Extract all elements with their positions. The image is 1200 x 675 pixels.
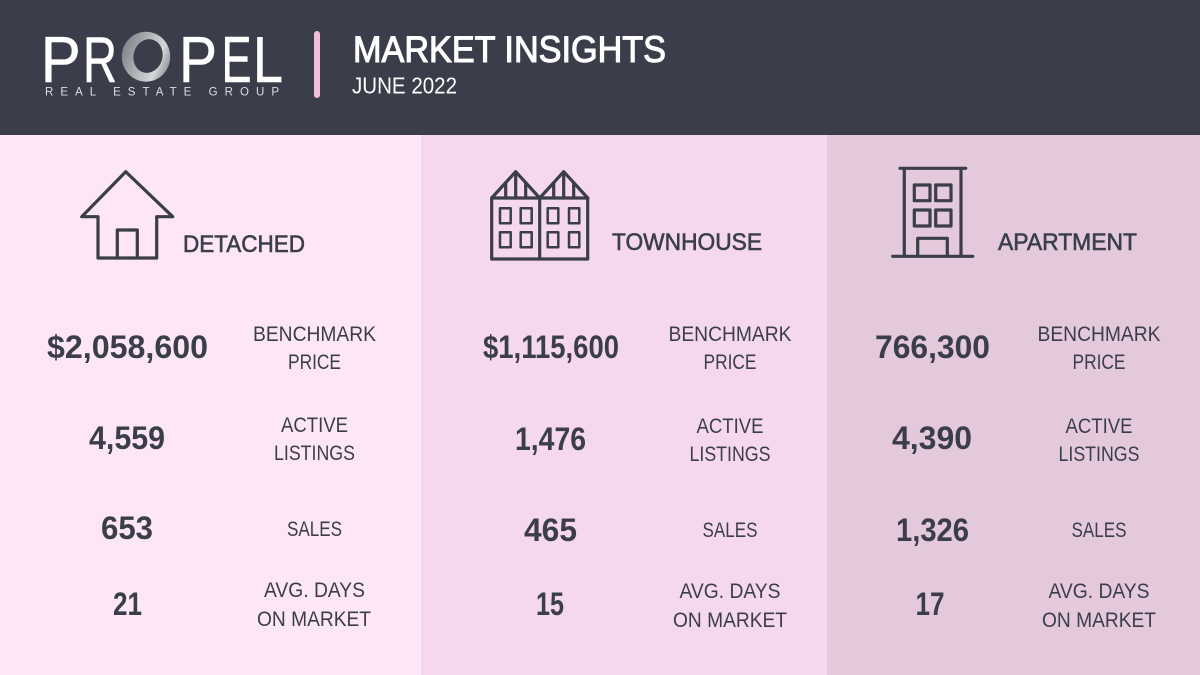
logo: R (83, 23, 117, 96)
stat: sales: 465 (524, 512, 577, 548)
stat: benchmark price: $1,115,600 (483, 329, 619, 365)
panel: townhouse (421, 135, 827, 675)
logo: E (222, 23, 252, 96)
divider (314, 31, 320, 98)
logo: P (179, 23, 217, 96)
stat: sales: 1,326 (896, 512, 969, 548)
stat: benchmark price: PRICE (288, 351, 341, 374)
stat: active listings: LISTINGS (690, 443, 770, 466)
stat: benchmark price (47, 323, 376, 374)
logo (41, 23, 283, 98)
stat: benchmark price: BENCHMARK (253, 323, 376, 346)
stat: active listings: LISTINGS (274, 442, 355, 465)
stat: average days on market: ON MARKET (673, 609, 787, 632)
stat: active listings: 1,476 (515, 421, 586, 457)
stat: average days on market: 21 (113, 586, 142, 622)
panel: detached (0, 135, 421, 675)
stat: average days on market: ON MARKET (1042, 609, 1156, 632)
header band (0, 0, 1200, 135)
stat: sales: SALES (1072, 519, 1126, 542)
stat: average days on market (916, 580, 1156, 632)
stat: average days on market: 17 (916, 586, 944, 622)
stat: benchmark price: $2,058,600 (47, 329, 208, 365)
heading: apartment: APARTMENT (998, 229, 1137, 256)
stat: active listings (89, 414, 355, 465)
logo: P (41, 23, 81, 96)
stat: average days on market: AVG. DAYS (680, 580, 780, 603)
stat: benchmark price (875, 323, 1160, 374)
stat: benchmark price: BENCHMARK (668, 323, 792, 346)
stat: benchmark price: PRICE (704, 351, 756, 374)
stat: average days on market (536, 580, 787, 632)
stat: benchmark price: BENCHMARK (1038, 323, 1160, 346)
stat: average days on market: AVG. DAYS (1048, 580, 1150, 603)
stat: active listings (515, 415, 770, 466)
stat: sales: SALES (702, 519, 758, 542)
stat: average days on market: 15 (536, 586, 564, 622)
title: MARKET INSIGHTS (353, 29, 666, 70)
heading: detached: DETACHED (183, 231, 305, 258)
stat: sales (101, 510, 342, 546)
stat: average days on market: AVG. DAYS (264, 579, 365, 602)
stat: average days on market: ON MARKET (257, 608, 371, 631)
icon: apartment building (893, 168, 973, 256)
icon: townhouse (492, 172, 588, 259)
stat: sales: 653 (101, 510, 153, 546)
stat: sales (896, 512, 1126, 548)
stat: sales: SALES (287, 518, 342, 541)
stat: active listings: 4,559 (89, 420, 165, 456)
stat: benchmark price (483, 323, 792, 374)
stat: sales (524, 512, 758, 548)
logo: L (253, 23, 283, 96)
stat: benchmark price: 766,300 (875, 329, 990, 365)
stat: active listings: ACTIVE (281, 414, 348, 437)
stat: active listings: ACTIVE (696, 415, 764, 438)
logo ring (122, 32, 170, 82)
stat: average days on market (113, 579, 371, 631)
heading: townhouse: TOWNHOUSE (612, 229, 762, 256)
icon: house (82, 172, 173, 258)
logo: REAL ESTATE GROUP (45, 86, 279, 98)
stat: active listings (892, 415, 1140, 466)
date: JUNE 2022 (352, 72, 457, 98)
stat: active listings: ACTIVE (1066, 415, 1132, 438)
stat: benchmark price: PRICE (1072, 351, 1126, 374)
stat: active listings: 4,390 (892, 420, 972, 456)
stat: active listings: LISTINGS (1058, 443, 1140, 466)
panel: apartment (827, 135, 1200, 675)
